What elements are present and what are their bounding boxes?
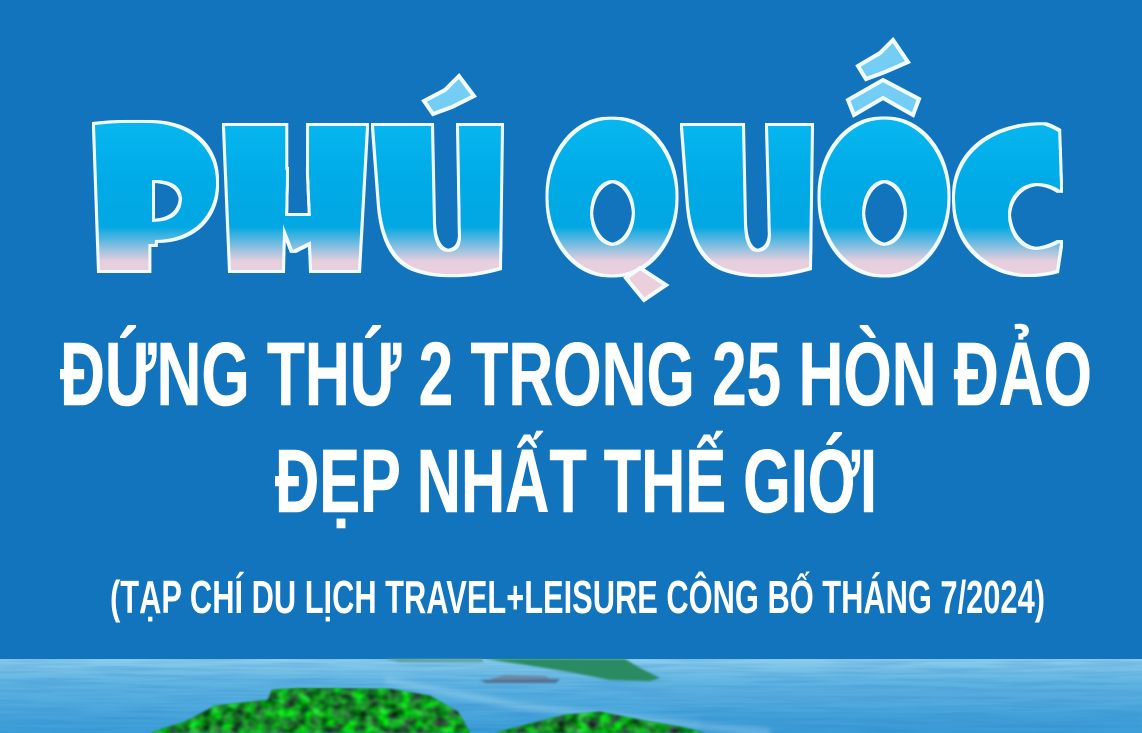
title: PHÚ QUỐC: Ú [371, 99, 507, 303]
title: PHÚ QUỐC: U [680, 101, 818, 302]
distant island [385, 659, 660, 683]
acute accent on U [424, 76, 474, 114]
foreground island [150, 688, 705, 733]
title: PHÚ QUỐC: H [219, 102, 375, 302]
Q tail [626, 268, 666, 300]
photo: island and sea [0, 659, 1142, 733]
title: PHÚ QUỐC: Q [549, 100, 674, 302]
title: PHÚ QUỐC [88, 40, 1064, 303]
circumflex on O [848, 80, 919, 115]
title: PHÚ QUỐC: Ố [821, 78, 946, 302]
acute accent on O [858, 40, 908, 79]
title: PHÚ QUỐC: C [957, 101, 1064, 302]
title: PHÚ QUỐC: P [88, 100, 215, 302]
subtitle line 2: ĐẸP NHẤT THẾ GIỚI [275, 430, 877, 532]
